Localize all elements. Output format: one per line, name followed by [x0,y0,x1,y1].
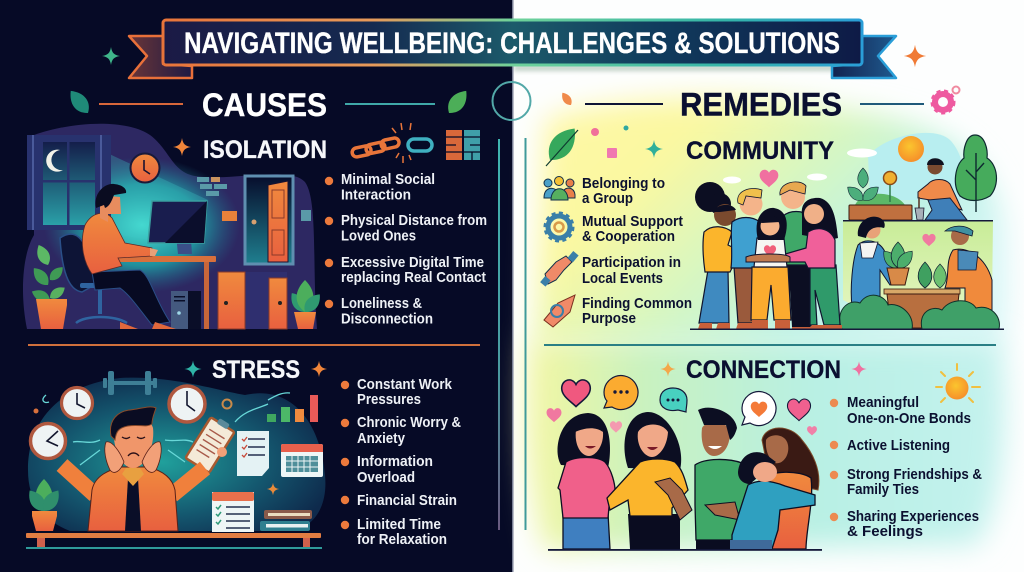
man green shirt [655,408,754,549]
centre seam [512,0,514,572]
small hearts [547,408,561,422]
person: yellow sweater [695,182,758,323]
list: isolation causes: Disconnection [341,310,433,328]
orange speech bubble [604,376,638,410]
icon: large leaf [542,122,583,166]
stress backdrop [28,378,325,531]
list: connection remedies: Family Ties [847,481,919,498]
pink gear [935,94,951,110]
list: community remedies: Mutual Support [582,213,683,230]
ledge line [843,220,993,222]
person: woman pink shirt [775,198,840,325]
heading: isolation: ISOLATION [203,136,327,164]
list: stress causes: Constant Work [357,376,453,393]
icon: gear [545,213,573,241]
panel: isolation [23,123,487,329]
sparkle: isolation [173,138,191,156]
list: stress causes: for Relaxation [357,531,447,548]
divider: causes horizontal [28,344,480,346]
ground line [548,549,822,551]
hair [95,184,126,208]
head [100,195,121,222]
list: connection remedies: Active Listening [847,437,950,454]
planter bottom [884,289,960,328]
list: community remedies [582,175,692,327]
list: community remedies: Finding Common [582,295,692,312]
title: NAVIGATING WELLBEING: CHALLENGES & SOLUTIONS [184,27,840,60]
computer tower [171,291,201,329]
list: isolation causes: Loneliness & [341,295,422,312]
tie [125,478,141,531]
list: community remedies: Belonging to [582,175,665,192]
list: stress causes: Information [357,453,433,470]
checklist paper [237,431,269,476]
person: blond blue shirt [731,189,762,323]
garden backdrop [843,221,993,315]
plant left [29,243,67,329]
heading: stress: STRESS [212,356,300,384]
list: stress causes: Pressures [357,391,421,408]
title banner [129,20,896,78]
list: stress causes: Anxiety [357,430,406,447]
legs [92,270,170,325]
ground line [690,328,1004,330]
list: connection remedies: Strong Friendships & [847,466,982,483]
stress scribbles [43,393,290,465]
open door [245,176,293,264]
divider: causes vertical [498,139,500,530]
woman pink shirt [557,413,615,549]
orange leaf [559,90,574,107]
sparkle: orange right of banner [904,45,926,67]
ring [222,400,232,408]
calendar right [281,444,323,477]
list: connection remedies: Meaningful [847,394,919,411]
hearts and speech bubbles [547,376,817,435]
clock top right [169,386,205,422]
white speech bubble with heart [742,392,776,426]
heading: remedies: REMEDIES [680,86,842,122]
sparkles: connection [660,361,867,377]
wall clock [130,154,160,182]
list: isolation causes: Physical Distance from [341,212,487,229]
causes heading decoration [65,86,472,118]
heart large [562,380,590,407]
panel: dark causes background [0,0,512,572]
hand [150,248,158,256]
plant right [287,280,324,329]
list: isolation causes: Loved Ones [341,228,416,244]
teal speech bubble [660,388,687,412]
orange dot [34,408,38,414]
icon: reaching hands [540,251,579,287]
small heart [922,234,936,246]
wall bricks [197,177,311,221]
list: stress causes: Overload [357,469,415,486]
list: isolation causes: Interaction [341,186,411,204]
hugged child [730,452,815,549]
window [27,135,111,230]
person: man green shirt [780,182,814,327]
divider: remedies horizontal [544,344,996,346]
sparkle: green left of banner [102,47,120,65]
collar [122,468,144,486]
list: isolation causes: Minimal Social [341,171,435,188]
books [260,510,312,531]
moon [46,150,63,172]
right hand on clipboard [217,447,227,457]
woman yellow shirt [607,412,688,549]
people group [695,182,842,329]
panel: connection [547,356,982,551]
list: stress causes: Chronic Worry & [357,414,461,431]
light beam [60,152,208,240]
seedlings [918,262,946,288]
list: connection remedies: Sharing Experiences [847,508,979,525]
desk [112,256,216,329]
monitor glow [44,157,240,293]
person: child centre [751,208,791,320]
centre ring [492,82,530,120]
bushes [840,295,999,329]
raised planter top [844,168,912,220]
list: community remedies: Purpose [582,310,636,327]
leaf left [65,86,94,118]
calendar checklist [212,492,254,532]
connection colour wash [527,340,1005,550]
sparkles: stress [184,360,327,378]
list: connection remedies: & Feelings [847,523,923,540]
icon: broken chain [351,123,432,163]
icon: people group [544,176,575,200]
clock left hand [30,424,66,458]
list: stress causes: Limited Time [357,516,441,533]
list: isolation causes: Excessive Digital Time [341,254,484,271]
heading: connection: CONNECTION [686,356,841,384]
sparkle: calendar area [267,483,279,495]
list: isolation causes [325,171,487,328]
cabinet [218,272,287,329]
clouds [723,174,827,184]
face [114,418,153,468]
eyes and mouth [122,437,145,456]
remedies colour wash [535,98,1006,351]
gardener with cap [945,226,992,312]
bar chart [267,395,318,422]
clipboard [185,414,237,473]
list: connection remedies [830,394,982,540]
left ribbon tail [129,36,192,78]
banner plate [163,20,862,65]
hugging mother [748,428,819,549]
heading: causes: CAUSES [202,87,327,123]
plant [24,479,64,531]
clock top left [62,388,92,418]
confetti [591,126,663,158]
tree [955,135,996,212]
list: connection remedies: One-on-One Bonds [847,410,971,427]
banner shadow [514,65,854,71]
gardener with pot [851,217,898,306]
list: isolation causes: replacing Real Contact [341,269,486,286]
arms [62,465,205,495]
heart right [787,399,811,421]
stressed person [62,407,227,531]
panel: community [540,122,1004,330]
icon: handshake [544,295,575,327]
list: community remedies: & Cooperation [582,228,675,245]
small ring [952,86,960,94]
heart above group [760,170,778,187]
icon: dumbbell [103,371,157,395]
remedies heading decoration [559,86,960,113]
isolation backdrop [23,124,317,329]
orange sweater [82,213,152,274]
panel: stress [24,356,461,549]
list: stress causes [341,376,461,548]
sky and sun [847,133,964,200]
list: community remedies: Participation in [582,254,681,271]
icon: brick wall [446,130,480,160]
potted plant [879,242,917,285]
divider: remedies vertical [524,138,526,530]
monitor [148,201,207,254]
hands [105,442,124,472]
hair [110,407,156,440]
desk [26,533,322,549]
leaf right [443,86,472,118]
icon: sun [936,364,980,402]
shoes [120,322,176,329]
shoes [698,320,842,329]
person at computer [82,184,176,329]
gardener kneeling [915,158,967,220]
list: community remedies: Local Events [582,270,663,287]
list: stress causes: Financial Strain [357,492,457,509]
right ribbon tail [832,36,896,78]
gesturing hands [655,478,692,520]
office chair [60,234,130,323]
list: community remedies: a Group [582,190,633,207]
panel: light remedies background [512,0,1024,572]
heading: community: COMMUNITY [686,137,834,165]
people connecting [557,408,819,549]
jacket [88,467,178,531]
hands joined [746,254,790,262]
